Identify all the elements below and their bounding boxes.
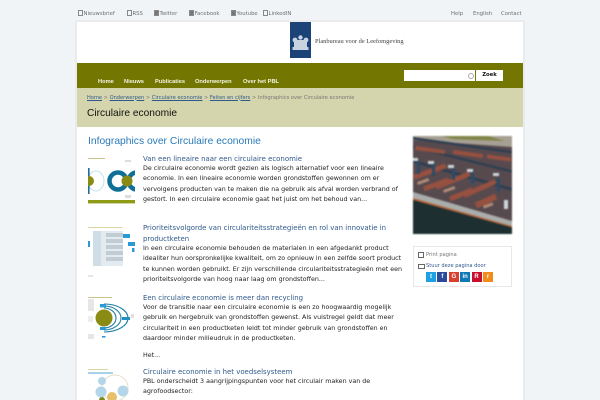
- icon: rss: [483, 272, 493, 282]
- logo text: Planbureau voor de Leefomgeving: [315, 38, 404, 44]
- item 4 heading: Circulaire economie in het voedselsysteem: [143, 368, 292, 376]
- item 3 text: Voor de transitie naar een circulaire economie is een zo hoogwaardig mogelijk: [143, 304, 391, 311]
- link: Twitter: Twitter: [160, 10, 177, 16]
- social icons: [426, 272, 493, 282]
- item 3 text: [143, 304, 394, 342]
- link: Nieuwsbrief: Nieuwsbrief: [84, 10, 115, 16]
- page frame shadow: [75, 20, 525, 400]
- breadcrumb: Home > Onderwerpen > Circulaire economie > Feiten en cijfers > Infographics over Circulaire economie: [87, 94, 354, 100]
- send link: Stuur deze pagina door: [426, 262, 486, 268]
- item 3 heading: Een circulaire economie is meer dan recycling: [143, 294, 303, 302]
- icon: linkedin: in: [463, 274, 468, 280]
- thumbnail: meer dan recycling: [88, 297, 134, 339]
- logo: Rijksoverheid emblem: [290, 22, 311, 58]
- icon: facebook: [437, 272, 447, 282]
- link: Contact: Contact: [501, 10, 522, 16]
- icon: facebook: f: [441, 274, 443, 280]
- icon: rss: r: [487, 274, 489, 280]
- white page panel: [77, 22, 523, 400]
- item 1 text: [143, 165, 398, 203]
- navigation bar: [77, 63, 523, 88]
- section heading: Infographics over Circulaire economie: [88, 136, 261, 146]
- nav: Publicaties: Publicaties: [155, 79, 185, 85]
- icon: twitter: t: [430, 274, 432, 280]
- link: RSS: RSS: [132, 10, 143, 16]
- item 3: [143, 294, 394, 359]
- item 4 text: agrofoodsector:: [143, 388, 193, 395]
- icon: envelope: [418, 264, 425, 268]
- link: Help: Help: [451, 10, 463, 16]
- thumbnail: prioriteitsvolgorde: [88, 227, 135, 276]
- icon: bookmark: [472, 272, 482, 282]
- item 1 text: vervolgens producten van te maken die na gebruik als afval worden verbrand of: [143, 186, 398, 193]
- icon: google: G: [451, 274, 456, 280]
- link: Youtube: Youtube: [236, 10, 258, 16]
- item 2 text: [143, 245, 402, 283]
- item 3 text: daardoor minder milieudruk in de productketen.: [143, 335, 296, 342]
- print link: Print pagina: [426, 252, 457, 258]
- link: Facebook: Facebook: [194, 10, 219, 16]
- link: Twitter: [154, 10, 178, 16]
- icon: linkedin: [460, 272, 470, 282]
- top utility links: [78, 10, 522, 16]
- item 1 text: gestort. In een circulaire economie gaat het juist om het behoud van...: [143, 196, 367, 203]
- photo: container terminal: [412, 135, 513, 235]
- nav: Over het PBL: Over het PBL: [243, 79, 279, 85]
- item 4 text: [143, 378, 370, 395]
- icon: google: [449, 272, 459, 282]
- nav: Onderwerpen: Onderwerpen: [195, 79, 232, 85]
- item 2 text: prioriteitsvolgorde van hoog naar laag om grondstoffen...: [143, 276, 325, 283]
- icon: bookmark: R: [474, 274, 479, 280]
- item 3 text: circulariteit in een productketen leidt tot minder gebruik van grondstoffen en: [143, 325, 388, 332]
- nav: Nieuws: Nieuws: [124, 79, 144, 85]
- search button: [476, 70, 503, 81]
- item 2 heading: Prioriteitsvolgorde van circulariteitsstrategieën en rol van innovatie in: [143, 224, 386, 232]
- icon: twitter: [426, 272, 436, 282]
- thumbnail: lineair naar circulair: [88, 158, 135, 204]
- share box: [413, 246, 512, 287]
- item 2 text: te kunnen worden gebruikt. Er zijn verschillende circulariteitsstrategieën met een: [143, 266, 402, 273]
- item 4 text: PBL onderscheidt 3 aangrijpingspunten voor het circulair maken van de: [143, 378, 370, 385]
- link: LinkedIN: LinkedIN: [268, 10, 291, 16]
- item 1: [143, 155, 398, 203]
- breadcrumb and title band: [77, 88, 523, 127]
- nav: Home: Home: [98, 79, 114, 85]
- page title: Circulaire economie: [87, 108, 177, 119]
- item 4: [143, 368, 370, 395]
- search icon: [468, 72, 474, 78]
- icon: printer: [418, 252, 424, 258]
- item 3 text: gebruik en hergebruik van grondstoffen gewenst. Als vuistregel geldt dat meer: [143, 314, 394, 321]
- thumbnail: voedselsysteem: [88, 369, 128, 400]
- item 1 text: De circulaire economie wordt gezien als logisch alternatief voor een lineaire: [143, 165, 384, 172]
- link: English: English: [473, 10, 492, 16]
- item 2 heading: [143, 224, 386, 242]
- item 2 text: In een circulaire economie behouden de materialen in een afgedankt product: [143, 245, 389, 252]
- item 1 heading: Van een lineaire naar een circulaire economie: [143, 155, 302, 163]
- search button: Zoek: [482, 72, 497, 78]
- link: RSS: [127, 10, 143, 16]
- item 1 text: economie. In een lineaire economie worden grondstoffen gewonnen om er: [143, 175, 379, 182]
- item 2: [143, 224, 402, 283]
- item 2 heading: productketen: [143, 234, 189, 242]
- search input: [404, 70, 475, 81]
- item 2 text: idealiter hun oorspronkelijke kwaliteit, om zo opnieuw in een zelfde soort product: [143, 255, 401, 262]
- item 3 ellipsis: Het...: [143, 352, 160, 359]
